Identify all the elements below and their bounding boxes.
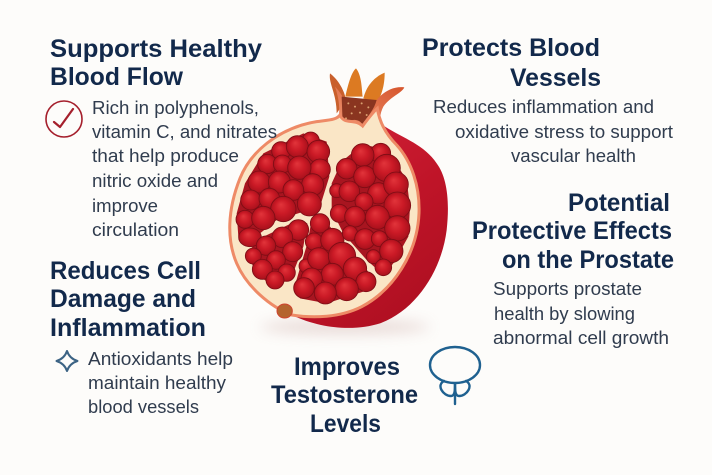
section: protects blood vessels: [422, 34, 673, 166]
body text: nitric oxide and: [92, 170, 218, 191]
body text: circulation: [92, 219, 179, 240]
heading: Protective Effects: [472, 217, 672, 245]
body text: [92, 97, 277, 240]
heading: Blood Flow: [50, 63, 184, 91]
crown seeds: [342, 97, 377, 125]
crown neck skin: [335, 87, 404, 137]
heading: improves testosterone levels: Levels: [310, 410, 381, 438]
body text: Rich in polyphenols,: [92, 97, 259, 118]
heading: [422, 34, 601, 92]
body text: [433, 96, 673, 166]
heading: Supports Healthy: [50, 35, 262, 63]
heading: [50, 257, 206, 342]
body text: Supports prostate: [493, 278, 642, 299]
body text: vitamin C, and nitrates: [92, 121, 277, 142]
body text: Reduces inflammation and: [433, 96, 654, 117]
ground shadow: [260, 320, 430, 334]
heading: improves testosterone levels: Testosterone: [271, 381, 418, 409]
heading: Inflammation: [50, 314, 206, 342]
heading: [50, 35, 262, 91]
outer red skin: [292, 123, 448, 328]
body text: Antioxidants help: [88, 348, 233, 369]
heading: Vessels: [510, 64, 601, 92]
pomegranate illustration: [230, 68, 448, 334]
section: potential protective effects on the prostate: [472, 189, 674, 348]
heading: [472, 189, 674, 274]
body text: [493, 278, 669, 348]
body text: vascular health: [511, 145, 636, 166]
arils: [236, 132, 411, 304]
body text: that help produce: [92, 145, 239, 166]
body text: blood vessels: [88, 396, 199, 417]
body text: abnormal cell growth: [493, 327, 669, 348]
cut face: [230, 108, 419, 317]
body text: health by slowing: [494, 303, 635, 324]
membrane shading: [237, 133, 410, 303]
icon: prostate: [430, 347, 480, 404]
heading: improves testosterone levels: [271, 353, 418, 438]
icon: sparkle: [56, 351, 78, 371]
body text: [88, 348, 233, 417]
crown sepals: [330, 68, 385, 113]
body text: maintain healthy: [88, 372, 227, 393]
heading: improves testosterone levels: Improves: [294, 353, 400, 381]
section: supports healthy blood flow: [46, 35, 277, 240]
heading: Protects Blood: [422, 34, 600, 62]
icon: check mark: [46, 101, 82, 137]
heading: Damage and: [50, 285, 196, 313]
body text: oxidative stress to support: [455, 121, 673, 142]
heading: Potential: [568, 189, 670, 217]
heading: on the Prostate: [502, 246, 674, 274]
heading: Reduces Cell: [50, 257, 201, 285]
stem nub: [277, 304, 292, 318]
body text: improve: [92, 195, 158, 216]
section: reduces cell damage and inflammation: [50, 257, 233, 417]
